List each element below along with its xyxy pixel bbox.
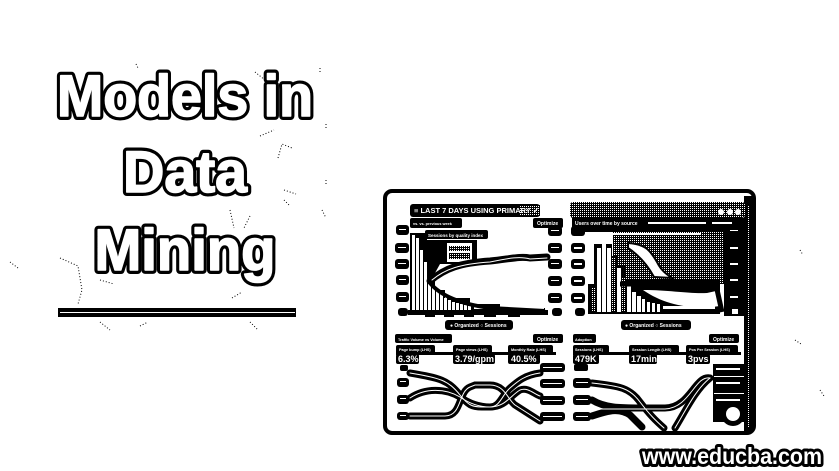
KPI section heading	[395, 334, 452, 343]
title: Models in	[57, 64, 313, 129]
header bar: ≡ LAST 7 DAYS USING PRIMARY ✓	[414, 206, 539, 215]
title	[57, 64, 313, 283]
KPI section heading: Adoption	[575, 338, 592, 342]
title: Mining	[94, 218, 276, 283]
KPI 5	[629, 345, 679, 364]
chart A left axis	[395, 225, 409, 316]
title underline	[58, 308, 296, 317]
chart A x axis	[408, 310, 548, 317]
header bar	[410, 204, 540, 217]
chart B right axis	[724, 226, 744, 316]
KPI 3	[508, 345, 553, 364]
KPI 3: 40.5%	[511, 354, 537, 364]
icon: round button	[721, 402, 745, 426]
chart A	[395, 218, 563, 330]
chart B legend: ● Organized ○ Sessions	[625, 323, 682, 329]
KPI section heading: Traffic Volume vs Volume	[398, 338, 444, 342]
flow chart left	[397, 363, 565, 421]
chart A tooltip	[427, 240, 477, 282]
right frame strip	[744, 196, 754, 431]
chart A right axis	[548, 226, 562, 316]
chart B bars	[588, 242, 720, 314]
chart B heading: Users over time by source	[575, 221, 638, 227]
chart A heading	[410, 218, 462, 228]
KPI 2: Page views (LHS)	[456, 348, 488, 352]
KPI 3: Monthly Rate (LHS)	[511, 348, 547, 352]
chart A curves	[430, 257, 547, 311]
chart B left axis	[571, 226, 585, 316]
chart B legend	[621, 320, 691, 330]
KPI section action: Optimize	[713, 337, 734, 343]
chart A legend: Sessions by quality index	[428, 233, 484, 238]
dashboard screenshot	[385, 190, 754, 433]
KPI 4: Sessions (LHS)	[575, 348, 604, 352]
chart A legend	[425, 230, 488, 239]
chart B curve area	[643, 290, 720, 307]
chart A bars	[410, 233, 545, 314]
flow labels left	[397, 365, 409, 420]
KPI 2: 3.79/gpm	[455, 354, 494, 364]
title: Data	[123, 140, 248, 205]
KPI section action	[533, 334, 563, 343]
KPI 4	[573, 345, 609, 364]
KPI 6: 3pvs	[688, 354, 709, 364]
KPI panel left	[395, 334, 563, 364]
KPI section action	[709, 334, 739, 343]
chart B white shape	[628, 243, 672, 278]
KPI 5: 17min	[631, 354, 657, 364]
chart A action	[533, 218, 563, 228]
background specks	[10, 64, 824, 396]
flow lines	[592, 378, 710, 428]
KPI 1	[396, 345, 435, 364]
KPI 2	[453, 345, 495, 364]
KPI 1: 6.3%	[398, 354, 419, 364]
chart A legend bottom	[445, 320, 513, 330]
flow chart right	[573, 364, 745, 428]
KPI 4: 479K	[575, 354, 597, 364]
chart A action: Optimize	[537, 221, 558, 227]
divider row	[573, 352, 741, 355]
title: Mining	[94, 218, 276, 283]
title: Models in	[57, 64, 313, 129]
flow labels left	[573, 364, 591, 421]
KPI 6: Pos Per Session (LHS)	[689, 348, 731, 352]
chart B	[571, 218, 744, 330]
dashboard frame	[385, 191, 754, 433]
KPI 6	[686, 345, 738, 364]
website url: www.educba.com	[641, 443, 822, 469]
divider row	[396, 352, 556, 355]
chart A legend bottom: ● Organized ○ Sessions	[450, 323, 507, 329]
KPI 1: Page bump (LHS)	[399, 348, 431, 352]
title: Data	[123, 140, 248, 205]
header bar right	[570, 190, 745, 218]
flow labels right	[713, 364, 745, 422]
chart B dotted area	[613, 232, 744, 284]
chart B curve	[620, 284, 722, 312]
KPI section heading	[573, 334, 596, 343]
KPI section action: Optimize	[537, 337, 558, 343]
chart B heading	[572, 218, 744, 232]
flow lines	[410, 373, 540, 421]
KPI panel right	[573, 334, 741, 364]
KPI 5: Session Length (LHS)	[632, 348, 672, 352]
chart A heading: vs. vs. previous week	[413, 222, 453, 226]
flow labels right	[540, 363, 565, 421]
chart B subtitle	[613, 233, 701, 235]
